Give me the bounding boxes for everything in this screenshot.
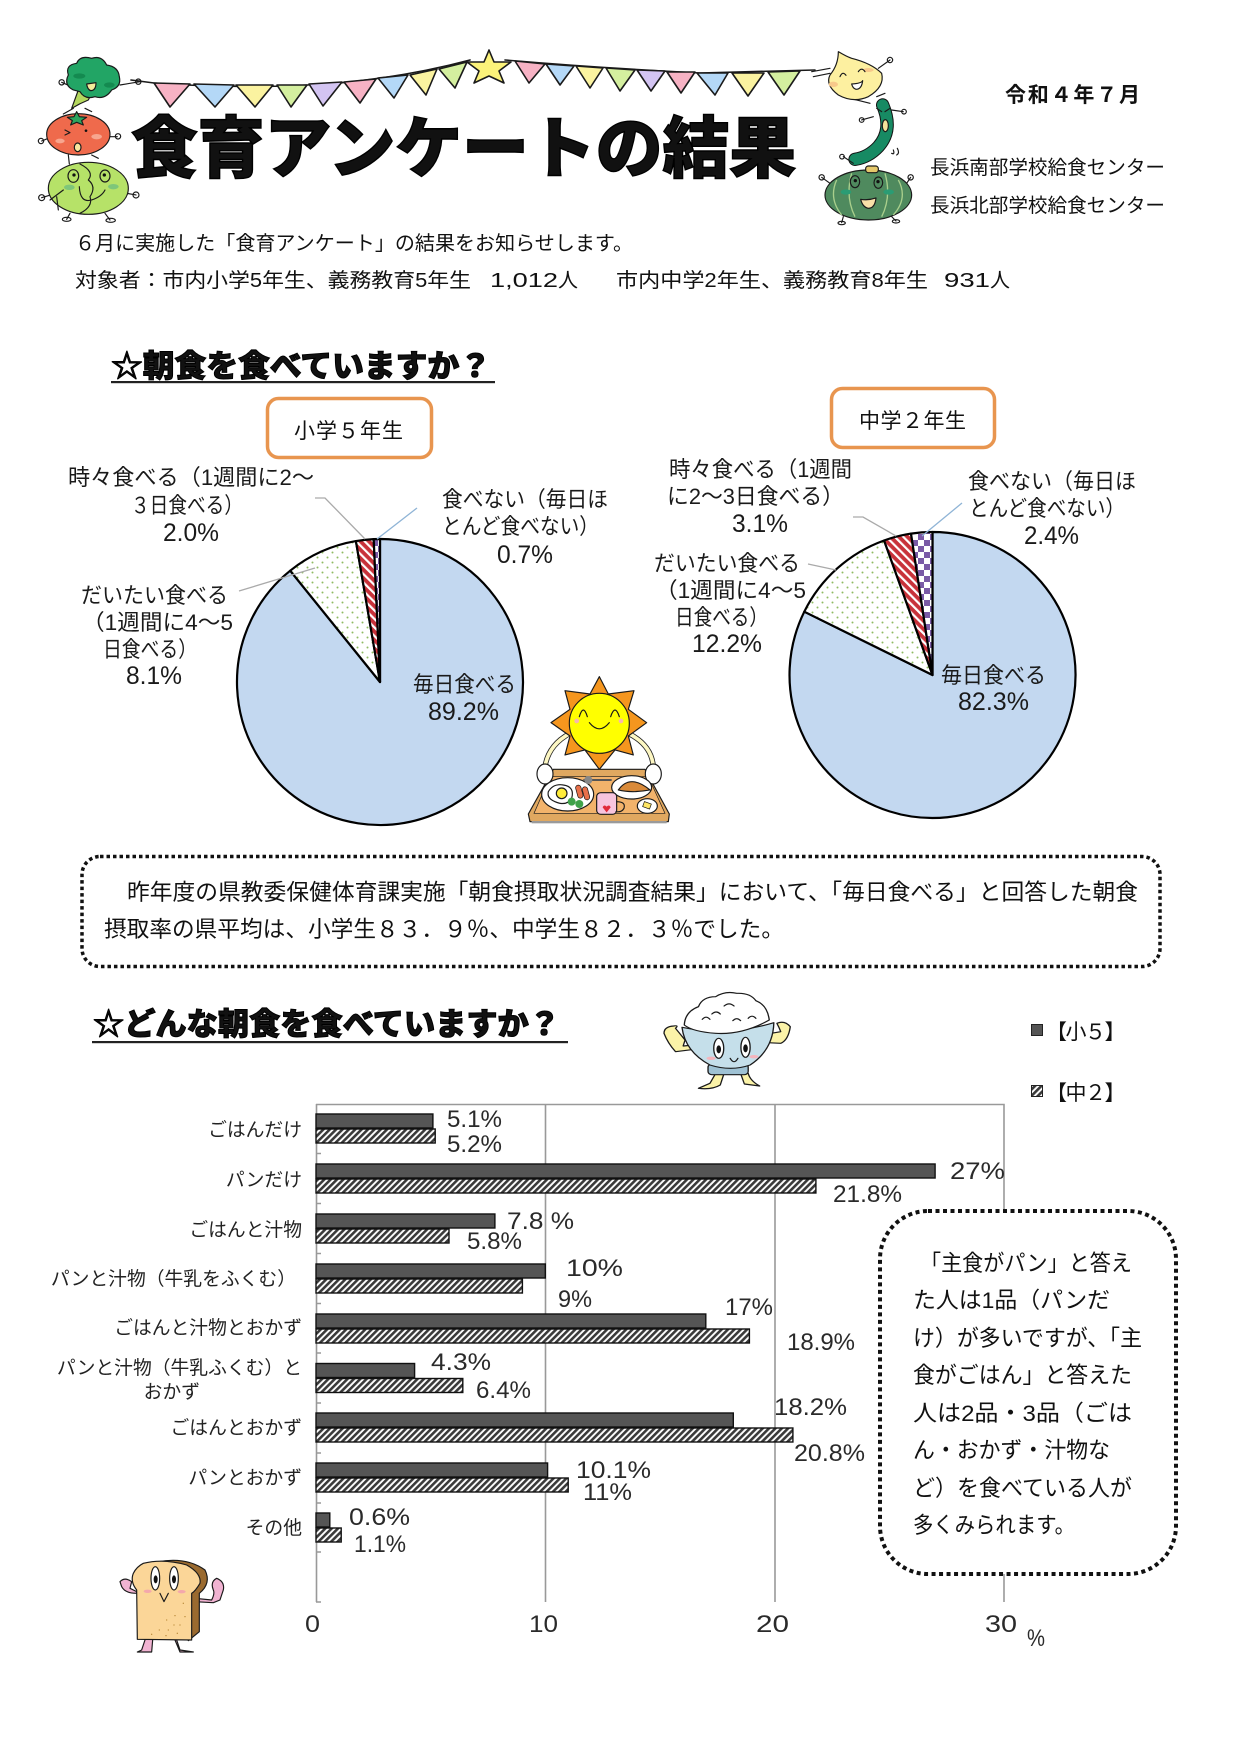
icon: pumpkin: [819, 166, 913, 225]
label: do not eat: [442, 487, 608, 569]
label: mostly eat: [654, 551, 806, 658]
data labels: 5.1%: [447, 1106, 502, 1133]
icon: bread character: [120, 1560, 224, 1652]
data labels: 7.8 %: [507, 1208, 574, 1235]
label box: 中学２年生: [859, 410, 966, 433]
data labels: 6.4%: [476, 1377, 531, 1404]
callout: bread vs rice comment: 人は2品・3品（ごは: [913, 1401, 1132, 1426]
icon: vegetable characters left: [38, 57, 141, 222]
label: sometimes: 2.0%: [163, 519, 219, 547]
data labels: 0.6%: [349, 1504, 410, 1531]
leader lines: [239, 498, 417, 591]
data labels: 9%: [558, 1286, 592, 1313]
icon: sun carrying breakfast tray: [528, 677, 669, 823]
intro text: [75, 232, 1010, 292]
label: mostly eat: 12.2%: [692, 630, 762, 658]
bars: [316, 1114, 935, 1542]
category labels: パンだけ: [226, 1169, 302, 1190]
axis labels: %: [1027, 1625, 1045, 1652]
icon: vegetable characters right: [812, 52, 913, 225]
data labels: 10%: [566, 1255, 623, 1282]
icon: onion: [812, 52, 893, 103]
label: do not eat: 0.7%: [497, 541, 553, 569]
label: mostly eat: （1週間に4～5: [82, 610, 233, 635]
data labels: 1.1%: [354, 1531, 406, 1558]
label: sometimes: [68, 465, 314, 547]
callout: prefecture average: [82, 856, 1160, 966]
label: sometimes: [667, 457, 852, 538]
category labels: おかず: [144, 1381, 200, 1402]
callout: bread vs rice comment: ん・おかず・汁物な: [913, 1438, 1110, 1463]
icon: rice bowl character: [664, 993, 790, 1089]
data labels: [349, 1106, 1005, 1558]
category labels: ごはんと汁物: [189, 1219, 302, 1240]
category labels: ごはんだけ: [208, 1119, 302, 1140]
label box: [832, 388, 994, 448]
category labels: パンと汁物（牛乳ふくむ）と: [57, 1357, 302, 1378]
heading: breakfast content: ☆どんな朝食を食べていますか？: [93, 1007, 560, 1042]
label: sometimes: 時々食べる（1週間: [669, 457, 852, 482]
axis labels: 20: [756, 1611, 789, 1638]
bar chart: [51, 1104, 1045, 1652]
category labels: ごはんと汁物とおかず: [114, 1317, 302, 1338]
label: every day: [413, 672, 516, 726]
data labels: 21.8%: [833, 1181, 902, 1208]
data labels: 27%: [950, 1158, 1005, 1185]
organisation 2: 長浜北部学校給食センター: [930, 195, 1165, 217]
panel: elementary pie: [68, 398, 608, 825]
legend: junior high: 【中２】: [1046, 1082, 1124, 1105]
organisation 1: 長浜南部学校給食センター: [930, 157, 1165, 179]
category labels: パンと汁物（牛乳をふくむ）: [51, 1268, 296, 1289]
callout: bread vs rice comment: [880, 1211, 1176, 1574]
pie chart: [790, 532, 1076, 818]
bunting garland: [131, 60, 815, 107]
heading: breakfast frequency: ☆朝食を食べていますか？: [111, 349, 491, 384]
label: every day: 毎日食べる: [413, 672, 516, 697]
title: 食育アンケートの結果: [131, 112, 796, 187]
axis labels: [305, 1611, 1045, 1652]
label: do not eat: [968, 469, 1136, 550]
data labels: 17%: [725, 1294, 773, 1321]
callout: prefecture average: 昨年度の県教委保健体育課実施「朝食摂取状況調査結果」において、「毎日食べる」と回答した朝食: [127, 880, 1138, 905]
data labels: 11%: [583, 1479, 632, 1506]
callout: bread vs rice comment: 多くみられます。: [913, 1513, 1075, 1538]
data labels: 18.2%: [774, 1394, 847, 1421]
label: every day: 82.3%: [958, 688, 1029, 716]
intro text: 1,012: [490, 270, 558, 292]
callout: bread vs rice comment: た人は1品（パンだ: [913, 1288, 1110, 1313]
label box: 小学５年生: [294, 420, 403, 443]
category labels: ごはんとおかず: [171, 1417, 302, 1438]
intro text: 対象者：市内小学5年生、義務教育5年生: [75, 269, 471, 292]
intro text: 人: [558, 270, 578, 292]
icon: cabbage: [39, 162, 139, 222]
label: every day: [941, 663, 1046, 716]
label: mostly eat: 8.1%: [126, 662, 182, 690]
intro text: ６月に実施した「食育アンケート」の結果をお知らせします。: [75, 232, 633, 255]
data labels: 20.8%: [794, 1440, 865, 1467]
icon: cucumber: [840, 105, 906, 163]
category labels: パンとおかず: [188, 1467, 302, 1488]
data labels: 4.3%: [431, 1349, 491, 1376]
label: mostly eat: だいたい食べる: [654, 551, 800, 576]
data labels: 5.2%: [447, 1131, 502, 1158]
data labels: 10.1%: [576, 1457, 651, 1484]
date: 令和４年７月: [1005, 84, 1140, 107]
axis labels: 10: [529, 1611, 558, 1638]
panel: junior high pie: [654, 388, 1136, 818]
pie chart: [237, 539, 523, 825]
label: do not eat: とんど食べない）: [969, 496, 1125, 521]
callout: bread vs rice comment: ど）を食べている人が: [913, 1476, 1132, 1501]
category labels: その他: [246, 1517, 302, 1538]
label: sometimes: 3.1%: [732, 510, 788, 538]
leader lines: [808, 503, 962, 570]
intro text: 市内中学2年生、義務教育8年生: [616, 269, 928, 292]
legend: elementary: 【小５】: [1046, 1021, 1124, 1044]
intro text: 人: [990, 270, 1010, 292]
callout: bread vs rice comment: 「主食がパン」と答え: [920, 1251, 1132, 1276]
label: do not eat: 食べない（毎日ほ: [968, 469, 1136, 494]
label: sometimes: に2～3日食べる）: [667, 484, 844, 509]
label: mostly eat: 日食べる）: [103, 637, 197, 662]
data labels: 5.8%: [467, 1228, 522, 1255]
callout: prefecture average: 摂取率の県平均は、小学生８３．９％、中学生８２．３％でした。: [104, 917, 784, 942]
icon: broccoli: [59, 57, 141, 114]
label: mostly eat: [81, 583, 233, 690]
label: sometimes: 時々食べる（1週間に2～: [68, 465, 314, 490]
label: do not eat: とんど食べない）: [442, 514, 599, 539]
icon: tomato: [38, 112, 121, 164]
axis labels: 30: [985, 1611, 1017, 1638]
label: do not eat: 2.4%: [1024, 522, 1079, 550]
axis labels: 0: [305, 1611, 320, 1638]
icon: star: [467, 50, 511, 83]
intro text: 931: [944, 270, 990, 292]
label: mostly eat: 日食べる）: [675, 605, 768, 630]
data labels: 18.9%: [787, 1329, 855, 1356]
label box: [268, 398, 432, 458]
legend: [1032, 1021, 1124, 1105]
label: every day: 89.2%: [428, 698, 499, 726]
label: sometimes: ３日食べる）: [131, 493, 243, 518]
label: do not eat: 食べない（毎日ほ: [442, 487, 608, 512]
label: mostly eat: （1週間に4～5: [655, 578, 806, 603]
label: every day: 毎日食べる: [941, 663, 1046, 688]
label: mostly eat: だいたい食べる: [81, 583, 228, 608]
callout: bread vs rice comment: 食がごはん」と答えた: [913, 1363, 1132, 1388]
callout: bread vs rice comment: け）が多いですが、「主: [913, 1326, 1142, 1351]
category labels: [51, 1119, 302, 1538]
